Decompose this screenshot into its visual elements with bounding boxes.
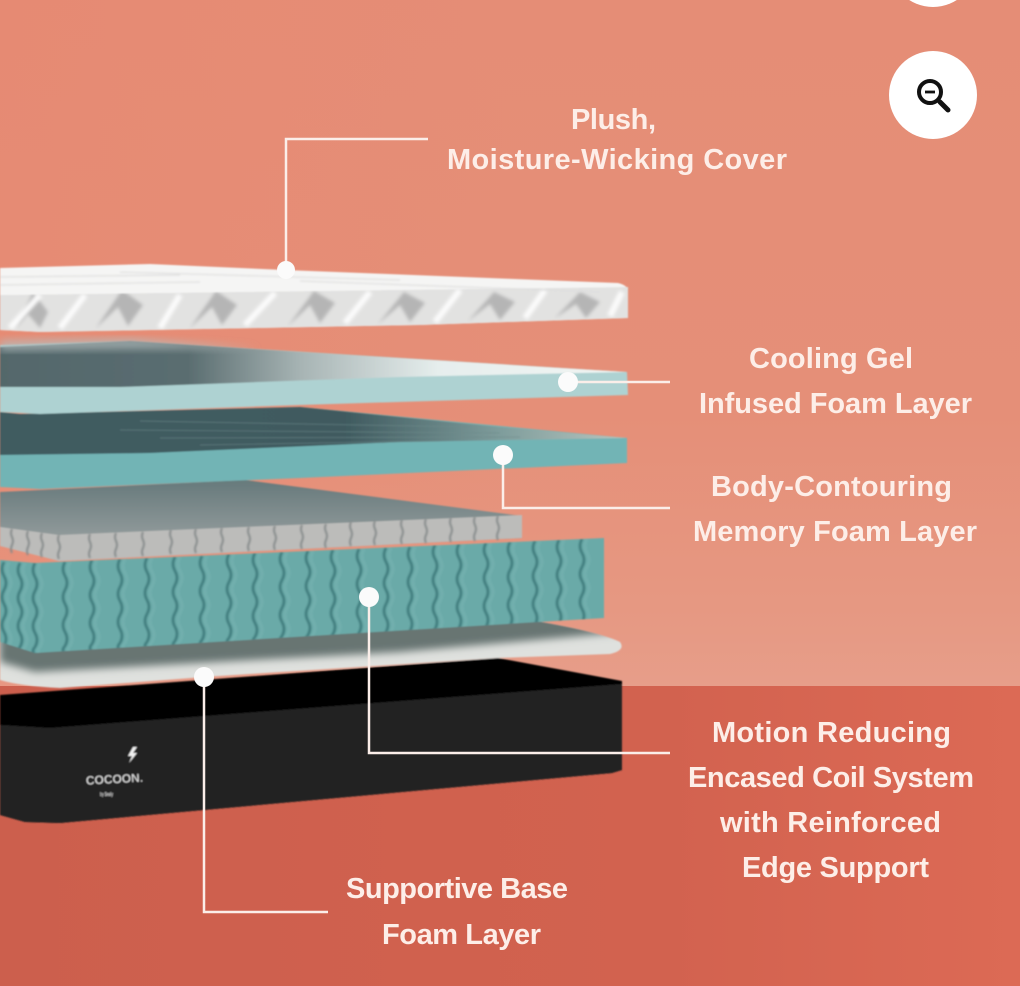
button: partial top circle xyxy=(889,0,977,7)
callout: coil system xyxy=(359,587,974,884)
callout: base foam: Supportive Base xyxy=(346,873,568,905)
callout: plush cover: Moisture-Wicking Cover xyxy=(447,144,787,176)
layer: supportive base foam xyxy=(0,621,622,690)
background floor xyxy=(0,686,1020,986)
layer: plush cover xyxy=(0,264,628,332)
callout: coil system: Encased Coil System xyxy=(688,762,974,794)
mattress stack xyxy=(0,264,628,823)
callout: memory foam: Body-Contouring xyxy=(711,471,952,503)
layer: cooling gel foam xyxy=(0,338,628,414)
callout: memory foam xyxy=(493,445,977,548)
layer: black base xyxy=(0,658,622,823)
callout: coil system: Motion Reducing xyxy=(712,717,951,749)
callout: cooling gel: Infused Foam Layer xyxy=(699,388,972,420)
logo: Cocoon: by Sealy xyxy=(100,792,113,798)
callout: plush cover: Plush, xyxy=(571,104,656,136)
button: zoom out xyxy=(889,51,977,139)
callout: cooling gel: Cooling Gel xyxy=(749,343,913,375)
callout: plush cover xyxy=(277,104,787,279)
callout: base foam: Foam Layer xyxy=(382,919,541,951)
callout: memory foam: Memory Foam Layer xyxy=(693,516,977,548)
callout: coil system: with Reinforced xyxy=(719,807,941,839)
callout: base foam xyxy=(194,667,568,951)
layer: memory foam xyxy=(0,407,627,489)
zoom buttons xyxy=(889,0,977,139)
callout: cooling gel xyxy=(558,343,972,420)
background wall xyxy=(0,0,1020,690)
logo: Cocoon xyxy=(86,747,143,798)
layer: quilted comfort top xyxy=(0,480,522,561)
layer: encased coils xyxy=(0,538,604,655)
callout: coil system: Edge Support xyxy=(742,852,929,884)
logo: Cocoon: COCOON. xyxy=(86,772,143,787)
